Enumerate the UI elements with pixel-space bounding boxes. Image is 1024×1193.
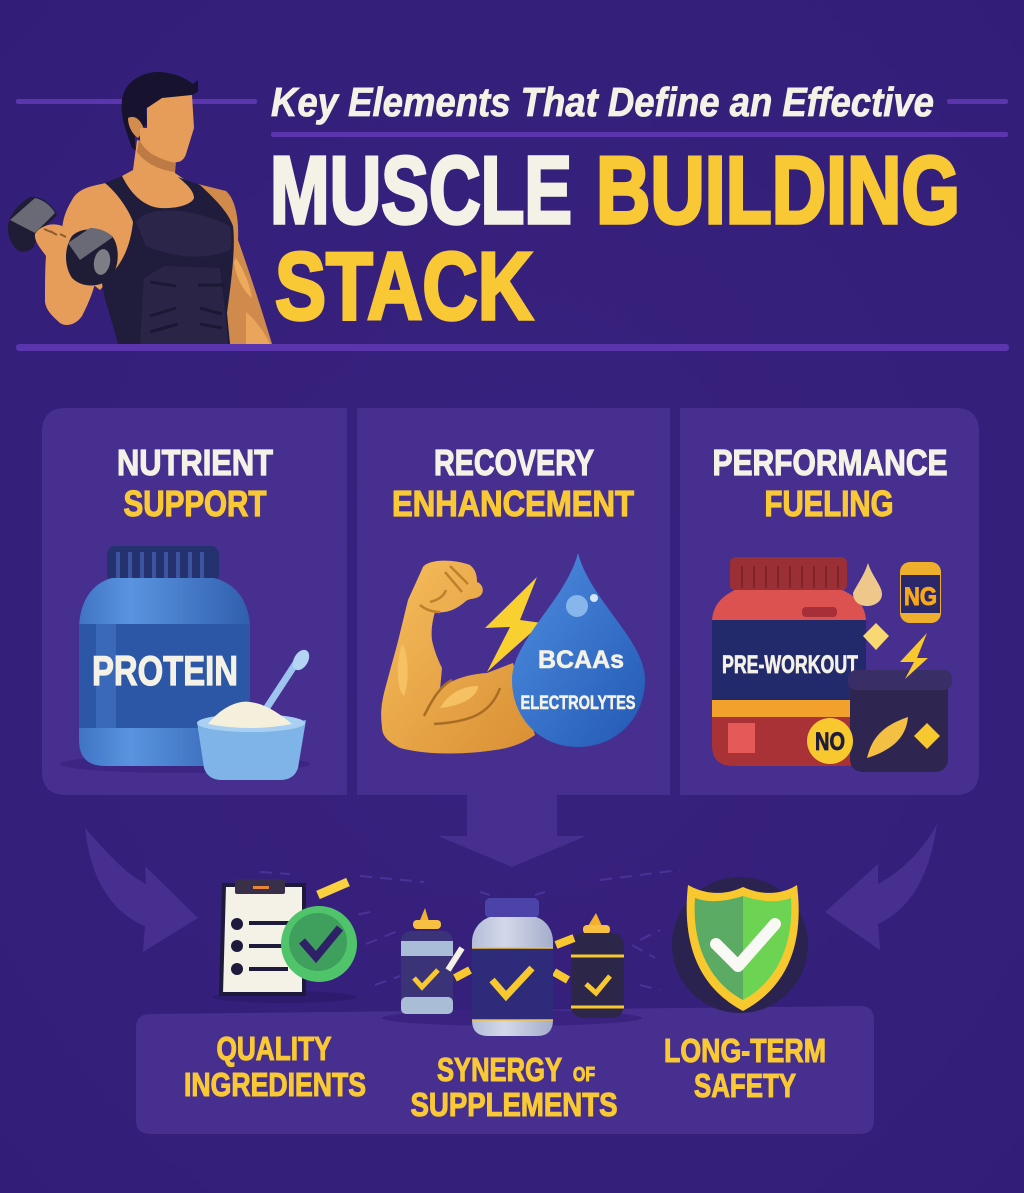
panel: three category cards bbox=[42, 408, 979, 795]
label: synergy of supplements bbox=[410, 1051, 618, 1123]
jar label highlight bbox=[96, 624, 116, 728]
icon: supplement bottles bbox=[382, 898, 642, 1036]
label: synergy of supplements: SUPPLEMENTS bbox=[410, 1086, 618, 1123]
shoulder handle bbox=[802, 607, 837, 617]
black tub bbox=[850, 685, 948, 772]
card: performance fueling bbox=[680, 408, 979, 795]
abs bbox=[140, 266, 228, 344]
fist lines bbox=[420, 566, 468, 612]
bowl bbox=[197, 720, 306, 780]
centre bottle lid bbox=[485, 898, 539, 918]
ear bbox=[128, 117, 144, 138]
dumbbell right face bbox=[92, 248, 112, 276]
heading: recovery enhancement: ENHANCEMENT bbox=[392, 483, 634, 524]
forearm highlight bbox=[398, 644, 408, 696]
label: long-term safety: LONG-TERM bbox=[664, 1032, 826, 1069]
upper arm bbox=[62, 183, 136, 290]
tub diamond bbox=[914, 723, 940, 749]
NO badge bbox=[807, 718, 853, 764]
droplet highlight bbox=[566, 595, 588, 617]
header rule: top right bbox=[947, 99, 1008, 104]
bicep crease bbox=[424, 680, 500, 724]
orange band bbox=[712, 700, 866, 717]
heading: nutrient support: NUTRIENT bbox=[117, 442, 273, 483]
jar shoulders bbox=[712, 590, 866, 622]
tank chest shading bbox=[136, 210, 232, 257]
clipboard bbox=[221, 885, 304, 994]
dumbbell right weight bbox=[66, 229, 118, 286]
jar middle bbox=[712, 620, 866, 700]
yellow tick accent bbox=[318, 882, 348, 895]
heading: performance fueling: PERFORMANCE bbox=[712, 442, 948, 483]
heading: nutrient support: SUPPORT bbox=[124, 483, 267, 524]
jar lid bbox=[730, 557, 847, 591]
card: nutrient support bbox=[42, 408, 347, 795]
label: quality ingredients bbox=[184, 1030, 366, 1103]
header rule: under subtitle bbox=[271, 132, 1008, 137]
jar lid bbox=[107, 546, 219, 582]
icon: clipboard with check bbox=[213, 879, 357, 1003]
icon: flexed arm, lightning and droplet bbox=[381, 553, 645, 754]
card: recovery enhancement bbox=[357, 408, 670, 795]
header rule: bottom bbox=[16, 344, 1009, 351]
base highlight bbox=[728, 723, 755, 753]
BCAAs label: BCAAs bbox=[538, 646, 624, 674]
jar label band bbox=[79, 624, 250, 728]
heading: recovery enhancement bbox=[392, 442, 634, 524]
right bottle bbox=[588, 913, 602, 926]
icon: radiating dashes bbox=[260, 870, 680, 990]
heading: performance fueling bbox=[712, 442, 948, 524]
label: synergy of supplements: SYNERGY bbox=[437, 1051, 562, 1088]
arrow: left curved bbox=[85, 828, 198, 952]
face bbox=[140, 95, 194, 162]
list items bbox=[249, 923, 290, 969]
arrow: right curved bbox=[825, 824, 937, 950]
illustration: bodybuilder with dumbbell bbox=[8, 72, 272, 344]
jar text: PRE-WORKOUT bbox=[722, 651, 858, 679]
label: long-term safety bbox=[664, 1032, 826, 1104]
clip bbox=[235, 879, 285, 894]
NG capsule bbox=[900, 562, 941, 623]
tub gem bbox=[867, 717, 908, 758]
connectors bbox=[448, 948, 462, 970]
label: long-term safety: SAFETY bbox=[694, 1067, 796, 1104]
panel: bottom label strip bbox=[136, 1006, 874, 1134]
icon: safety shield bbox=[672, 877, 808, 1013]
spoon bbox=[264, 660, 298, 712]
flexed arm bbox=[381, 561, 535, 754]
centre bottle bbox=[472, 917, 553, 1036]
powder bbox=[208, 702, 292, 728]
dumbbell left face bbox=[10, 198, 55, 233]
bicep highlight bbox=[440, 686, 478, 708]
amber droplet bbox=[853, 563, 882, 606]
subtitle: Key Elements That Define an Effective bbox=[271, 79, 934, 125]
icon: pre-workout jar and extras: NG bbox=[904, 583, 937, 611]
hair bbox=[122, 72, 198, 150]
green check badge bbox=[281, 906, 357, 982]
heading: performance fueling: FUELING bbox=[764, 483, 894, 524]
jar label text: PROTEIN bbox=[92, 647, 238, 694]
heading: recovery enhancement: RECOVERY bbox=[434, 442, 594, 483]
heading: nutrient support bbox=[117, 442, 273, 524]
right arm bbox=[198, 184, 272, 344]
left bottle bbox=[418, 908, 430, 925]
title line two: STACK bbox=[275, 233, 533, 340]
tank top bbox=[102, 176, 234, 344]
icon: protein jar with bowl bbox=[60, 546, 313, 780]
label: synergy of supplements: OF bbox=[573, 1064, 595, 1086]
title line one white: MUSCLE bbox=[270, 137, 572, 244]
label: quality ingredients: QUALITY bbox=[216, 1030, 332, 1067]
label: quality ingredients: INGREDIENTS bbox=[184, 1066, 366, 1103]
title block bbox=[270, 79, 960, 340]
lightning bolt bbox=[485, 577, 542, 672]
dumbbell left weight bbox=[8, 197, 57, 252]
jar body bbox=[79, 578, 250, 766]
icon: pre-workout jar and extras: NO bbox=[815, 728, 845, 756]
header rule: top left bbox=[16, 99, 257, 104]
left bottle band bbox=[401, 941, 453, 956]
jar base bbox=[712, 717, 866, 766]
icon: pre-workout jar and extras bbox=[712, 557, 952, 772]
arrow: centre down bbox=[438, 795, 586, 867]
sparkle bbox=[863, 623, 889, 650]
droplet bbox=[512, 553, 645, 747]
lightning bbox=[900, 633, 928, 679]
neck and chest bbox=[122, 140, 200, 210]
electrolytes label: ELECTROLYTES bbox=[520, 693, 636, 714]
forearm and hand bbox=[35, 224, 96, 325]
